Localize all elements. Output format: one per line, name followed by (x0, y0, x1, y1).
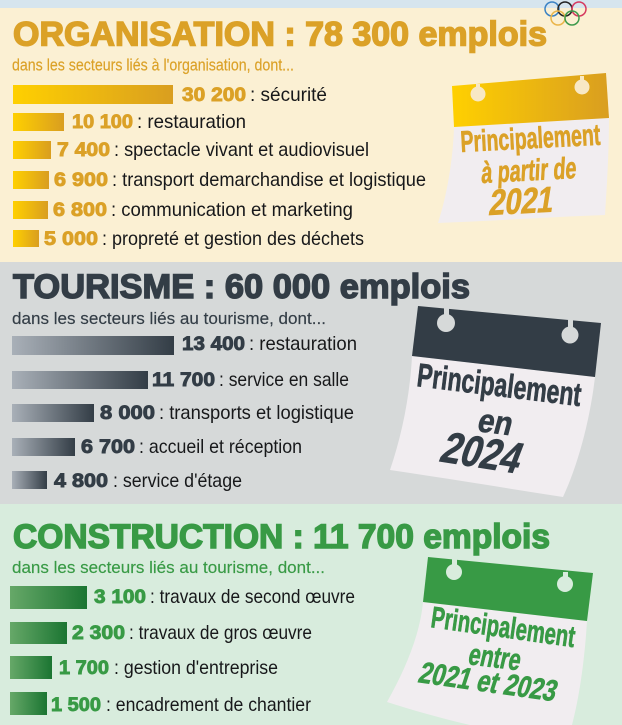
panel: tourisme (0, 262, 622, 504)
row: encadrement: 1 500 (51, 694, 101, 716)
row: transport: 6 900 (54, 169, 108, 191)
row: service d'étage (12, 470, 242, 492)
calendar: en 2024 (390, 306, 601, 497)
calendar: à partir de 2021 (438, 73, 609, 223)
row: restauration: : restauration (249, 333, 357, 355)
row: restauration (12, 333, 357, 355)
top band (0, 0, 622, 8)
calendar: en 2024: 2024 (434, 424, 530, 483)
row: sécurité (13, 84, 327, 106)
row: service d'étage: : service d'étage (113, 470, 242, 492)
row: gestion: 1 700 (59, 657, 109, 679)
row: transports: 8 000 (100, 402, 155, 424)
row: encadrement: : encadrement de chantier (106, 694, 311, 716)
row: service en salle: 11 700 (152, 369, 215, 391)
subheading: construction: dans les secteurs liés au tourisme, dont... (12, 558, 325, 577)
calendar: entre 2021 et 2023: entre (465, 639, 524, 677)
row: encadrement (10, 692, 311, 716)
row: propreté: 5 000 (44, 228, 98, 250)
row: accueil: : accueil et réception (139, 436, 302, 458)
heading: organisation: ORGANISATION : 78 300 emplois (13, 16, 547, 54)
row: gestion (10, 656, 278, 679)
row: restauration: 10 100 (72, 111, 133, 133)
row: gestion: : gestion d'entreprise (114, 657, 278, 679)
row: service en salle: : service en salle (219, 369, 349, 391)
row: spectacle: : spectacle vivant et audiovisuel (114, 139, 369, 161)
subheading: tourisme: dans les secteurs liés au tourisme, dont... (12, 309, 326, 328)
row: restauration: 13 400 (182, 333, 245, 355)
subheading: organisation: dans les secteurs liés à l'organisation, dont... (12, 56, 294, 74)
row: sécurité: : sécurité (250, 84, 327, 106)
heading: tourisme: TOURISME : 60 000 emplois (13, 268, 470, 306)
row: communication: : communication et marketing (111, 199, 353, 221)
calendar: en 2024: en (474, 403, 517, 443)
row: sécurité: 30 200 (182, 84, 246, 106)
row: propreté: : propreté et gestion des déchets (102, 228, 364, 250)
row: restauration: : restauration (137, 111, 246, 133)
row: accueil (12, 436, 302, 458)
row: spectacle (13, 139, 369, 161)
calendar: à partir de 2021: 2021 (487, 179, 557, 223)
heading: construction: CONSTRUCTION : 11 700 emplois (13, 518, 550, 556)
row: second œuvre (10, 586, 355, 609)
calendar: entre 2021 et 2023: 2021 et 2023 (415, 657, 562, 708)
icon: olympic rings (545, 2, 586, 25)
row: service en salle (12, 369, 349, 391)
panel: organisation (0, 8, 622, 262)
row: service d'étage: 4 800 (54, 470, 108, 492)
row: spectacle: 7 400 (57, 139, 110, 161)
row: transport: : transport demarchandise et logistique (112, 169, 426, 191)
row: communication: 6 800 (53, 199, 107, 221)
row: accueil: 6 700 (81, 436, 135, 458)
row: second œuvre: : travaux de second œuvre (150, 586, 355, 608)
panel: construction (0, 504, 622, 725)
row: gros œuvre: : travaux de gros œuvre (129, 622, 312, 644)
row: transports (12, 402, 354, 424)
calendar: entre 2021 et 2023 (387, 557, 593, 725)
row: gros œuvre: 2 300 (72, 622, 125, 644)
row: restauration (13, 111, 246, 133)
row: communication (13, 199, 353, 221)
row: second œuvre: 3 100 (94, 586, 146, 608)
row: gros œuvre (10, 622, 312, 644)
row: transports: : transports et logistique (159, 402, 354, 424)
